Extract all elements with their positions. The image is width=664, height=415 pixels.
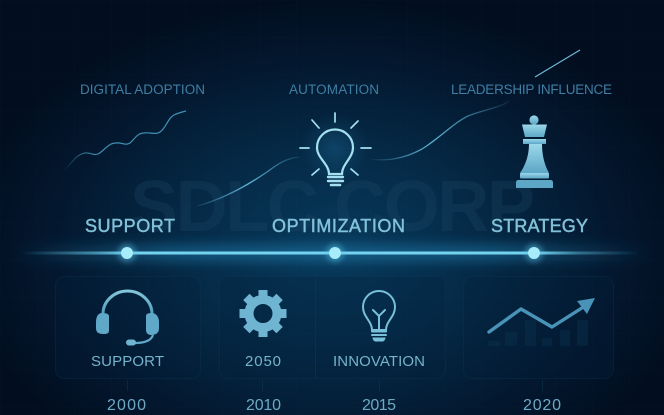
label: innovation: INNOVATION [333, 353, 425, 370]
icon: headset [96, 291, 159, 346]
label: support: SUPPORT [85, 216, 175, 236]
trend line: digital adoption [63, 111, 186, 172]
year: 2000: 2000 [107, 397, 146, 414]
icon: chess queen [516, 115, 553, 188]
panel: 2050 card [220, 276, 446, 378]
label: 2050: 2050 [245, 353, 281, 370]
icon: glowing light bulb [300, 113, 371, 185]
label: support card: SUPPORT [91, 353, 164, 370]
card connectors [128, 277, 542, 391]
timeline node 2020 [525, 244, 543, 262]
trend line: arrow tail [535, 50, 580, 77]
watermark: SDLC CORP: SDLC CORP [130, 167, 535, 247]
trend line: automation [197, 157, 300, 206]
heading: leadership influence: LEADERSHIP INFLUENCE [451, 82, 612, 97]
timeline node 2000 [118, 244, 136, 262]
label: strategy: STRATEGY [491, 216, 588, 236]
year: 2010: 2010 [246, 397, 281, 414]
timeline node 2010 [326, 244, 344, 262]
icon: innovation bulb [363, 291, 395, 341]
panel: support card [56, 276, 200, 378]
icon: growth arrow chart [488, 298, 595, 346]
year: 2020: 2020 [523, 397, 561, 414]
panel: strategy card [464, 276, 614, 378]
year: 2015: 2015 [362, 397, 396, 414]
icon: gear [240, 290, 286, 337]
timeline [10, 244, 654, 262]
heading: digital adoption: DIGITAL ADOPTION [80, 82, 205, 97]
heading: automation: AUTOMATION [289, 82, 379, 97]
trend line: leadership [369, 101, 509, 160]
label: optimization: OPTIMIZATION [272, 216, 405, 236]
